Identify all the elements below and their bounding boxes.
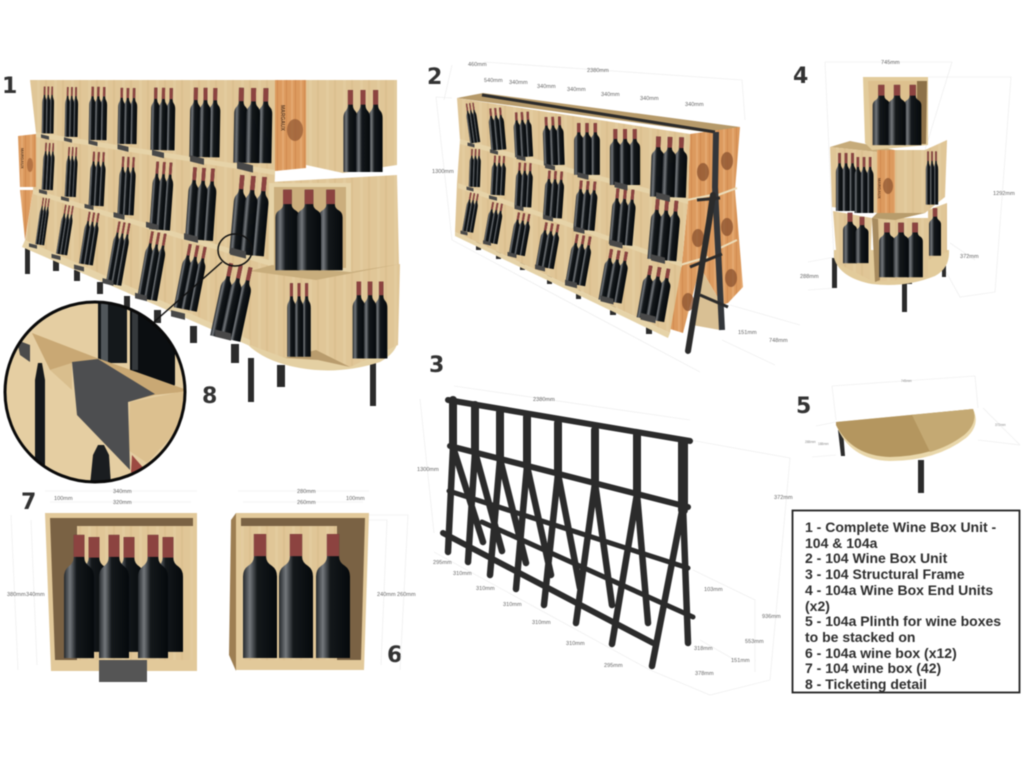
legend text: 104 & 104a (805, 535, 878, 551)
dimensions: figure 3: 310mm (566, 641, 585, 647)
dimensions: figure 3: 295mm (604, 663, 623, 669)
end panels: figure 2 (457, 93, 743, 333)
back bars: figure 3 (449, 491, 693, 617)
dimensions: figure 6: 240mm (377, 592, 396, 598)
dimensions: figure 2: 340mm (640, 96, 659, 102)
number 4: 4 (793, 64, 808, 89)
dimensions: figure 3: 295mm (433, 560, 452, 566)
top bar: figure 2 (482, 95, 715, 132)
bottles: figure 7 (64, 535, 183, 658)
dimensions: figure 6 (238, 489, 416, 670)
dimensions: figure 4: 372mm (960, 254, 979, 260)
dimensions: figure 3: 1300mm (417, 467, 439, 473)
figure 3: structural frame (417, 386, 793, 695)
dimensions: figure 7: 320mm (113, 500, 132, 506)
bottom boxes: figure 4 (833, 203, 947, 282)
legend text: 3 - 104 Structural Frame (805, 566, 965, 582)
dimensions: figure 2: 1300mm (432, 169, 454, 175)
dimensions: figure 7: 340mm (113, 489, 132, 495)
dimensions: figure 4: 745mm (881, 60, 900, 66)
dimensions: figure 3: 553mm (745, 639, 764, 645)
dimensions: figure 3: 310mm (532, 620, 551, 626)
dimensions: figure 6: 100mm (346, 496, 365, 502)
dimensions: figure 2: 151mm (738, 330, 757, 336)
dimensions: figure 3: 310mm (503, 602, 522, 608)
plinth: figure 1 (247, 338, 398, 370)
dimensions: figure 3: 318mm (694, 646, 713, 652)
dimensions: figure 3 (417, 386, 793, 695)
legend text: 6 - 104a wine box (x12) (805, 645, 957, 661)
dimensions: figure 6: 260mm (297, 500, 316, 506)
legend text: 5 - 104a Plinth for wine boxes (805, 613, 1001, 629)
dimensions: figure 2: 340mm (567, 87, 586, 93)
dimensions: figure 4: 1292mm (993, 191, 1015, 197)
dimensions: figure 7: 340mm (26, 592, 45, 598)
dimensions: figure 3: 103mm (704, 587, 723, 593)
dimensions: figure 3: 372mm (774, 495, 793, 501)
A-frame legs: figure 3 (448, 447, 688, 666)
dimensions: figure 5: 288mm (805, 440, 816, 444)
end boxes: figure 1 (250, 80, 400, 367)
legend text: 2 - 104 Wine Box Unit (805, 550, 948, 566)
legend text: 7 - 104 wine box (42) (805, 660, 941, 676)
legend text: 1 - Complete Wine Box Unit - (805, 519, 997, 535)
figure 5: plinth (805, 376, 1020, 493)
wine box wall: figure 1 (18, 80, 306, 346)
bottles: figure 1 (35, 86, 387, 358)
A-frame: figure 2 (688, 132, 728, 351)
circular ticketing detail (0, 300, 190, 485)
number 2: 2 (427, 65, 442, 90)
crate branding: figure 1: MARGAUX (20, 148, 25, 169)
top box: figure 4 (863, 77, 928, 150)
number 7: 7 (21, 490, 36, 515)
dimensions: figure 5: 745mm (901, 379, 912, 383)
dimensions: figure 2: 2380mm (587, 68, 609, 74)
dimensions: figure 2: 748mm (769, 338, 788, 344)
uprights: figure 3 (453, 400, 637, 494)
top surface: figure 5 (836, 409, 974, 457)
figure 7: 104 wine box front (7, 489, 197, 682)
dimensions: figure 2: 340mm (601, 92, 620, 98)
crate: figure 7 (45, 513, 197, 671)
number 1: 1 (2, 74, 17, 99)
plinth: figure 4 (834, 250, 949, 285)
crate: figure 6 (236, 513, 369, 670)
dimensions: figure 3: 378mm (695, 671, 714, 677)
bottles: figure 2 (462, 103, 688, 322)
dimensions: figure 6: 280mm (297, 489, 316, 495)
dimensions: figure 3: 310mm (453, 571, 472, 577)
middle boxes: figure 4: MARGAUX (877, 178, 882, 199)
ticket bracket: figure 7 (99, 660, 147, 682)
dimensions: figure 2: 540mm (484, 78, 503, 84)
figure 1: complete wine box unit (18, 80, 400, 406)
horizontal bars: figure 3 (443, 400, 690, 643)
dimensions: figure 3: 936mm (762, 614, 781, 620)
legs: figure 4 (832, 258, 946, 312)
wine box wall: figure 2 (455, 98, 690, 338)
dimensions: figure 3: 310mm (476, 586, 495, 592)
figure 6: 104a wine box front (229, 489, 416, 671)
legend text: (x2) (805, 598, 830, 614)
dimensions: figure 2: 340mm (537, 84, 556, 90)
legend box (792, 510, 1020, 692)
number 6: 6 (387, 643, 402, 668)
number 8: 8 (202, 384, 217, 409)
figure 4: end unit (800, 60, 1015, 312)
crate branding: figure 1 (20, 105, 303, 172)
dimensions: figure 2: 340mm (685, 102, 704, 108)
back wall: figure 6 (241, 526, 337, 660)
dimensions: figure 7: 100mm (54, 496, 73, 502)
dimensions: figure 2: 460mm (468, 62, 487, 68)
ticket brackets: figure 2 (460, 143, 670, 323)
end upright: figure 3 (678, 442, 688, 510)
legs: figure 2 (476, 240, 652, 334)
crate branding: figure 1: MARGAUX (279, 105, 285, 131)
dimensions: figure 7: 380mm (7, 592, 26, 598)
dimensions: figure 5 (805, 376, 1020, 457)
dimensions: figure 4 (800, 60, 1015, 297)
crate interior: figure 7 (50, 518, 193, 660)
legs: figure 5 (838, 430, 924, 493)
dimensions: figure 4: 288mm (800, 274, 819, 280)
legs: figure 1 (25, 240, 376, 406)
back wall: figure 7 (77, 526, 193, 660)
number 5: 5 (796, 394, 811, 419)
dimensions: figure 6: 260mm (397, 592, 416, 598)
dimensions: figure 2 (432, 62, 800, 372)
crate logos: figure 2 (682, 152, 737, 311)
number 3: 3 (429, 353, 444, 378)
dimensions: figure 7 (7, 489, 197, 670)
half disc: figure 5 (836, 409, 976, 461)
legend text: to be stacked on (805, 629, 915, 645)
lighter segment: figure 5 (912, 409, 974, 452)
side panel: figure 6 (229, 513, 236, 671)
dimensions: figure 3: 2380mm (533, 397, 555, 403)
dimensions: figure 5: 188mm (818, 442, 829, 446)
dimensions: figure 2: 340mm (509, 80, 528, 86)
middle boxes: figure 4 (830, 140, 947, 220)
legend text: 4 - 104a Wine Box End Units (805, 582, 993, 598)
legend text: 8 - Ticketing detail (805, 676, 927, 692)
ticket brackets: figure 1 (29, 134, 253, 341)
dimensions: figure 5: 372mm (995, 423, 1006, 427)
bottles: figure 6 (243, 534, 350, 658)
crate interior: figure 6 (241, 518, 365, 660)
detail callout ring (154, 234, 252, 322)
legend text (805, 519, 1001, 692)
dimensions: figure 3: 151mm (731, 658, 750, 664)
figure 2: wine box unit (432, 62, 800, 372)
